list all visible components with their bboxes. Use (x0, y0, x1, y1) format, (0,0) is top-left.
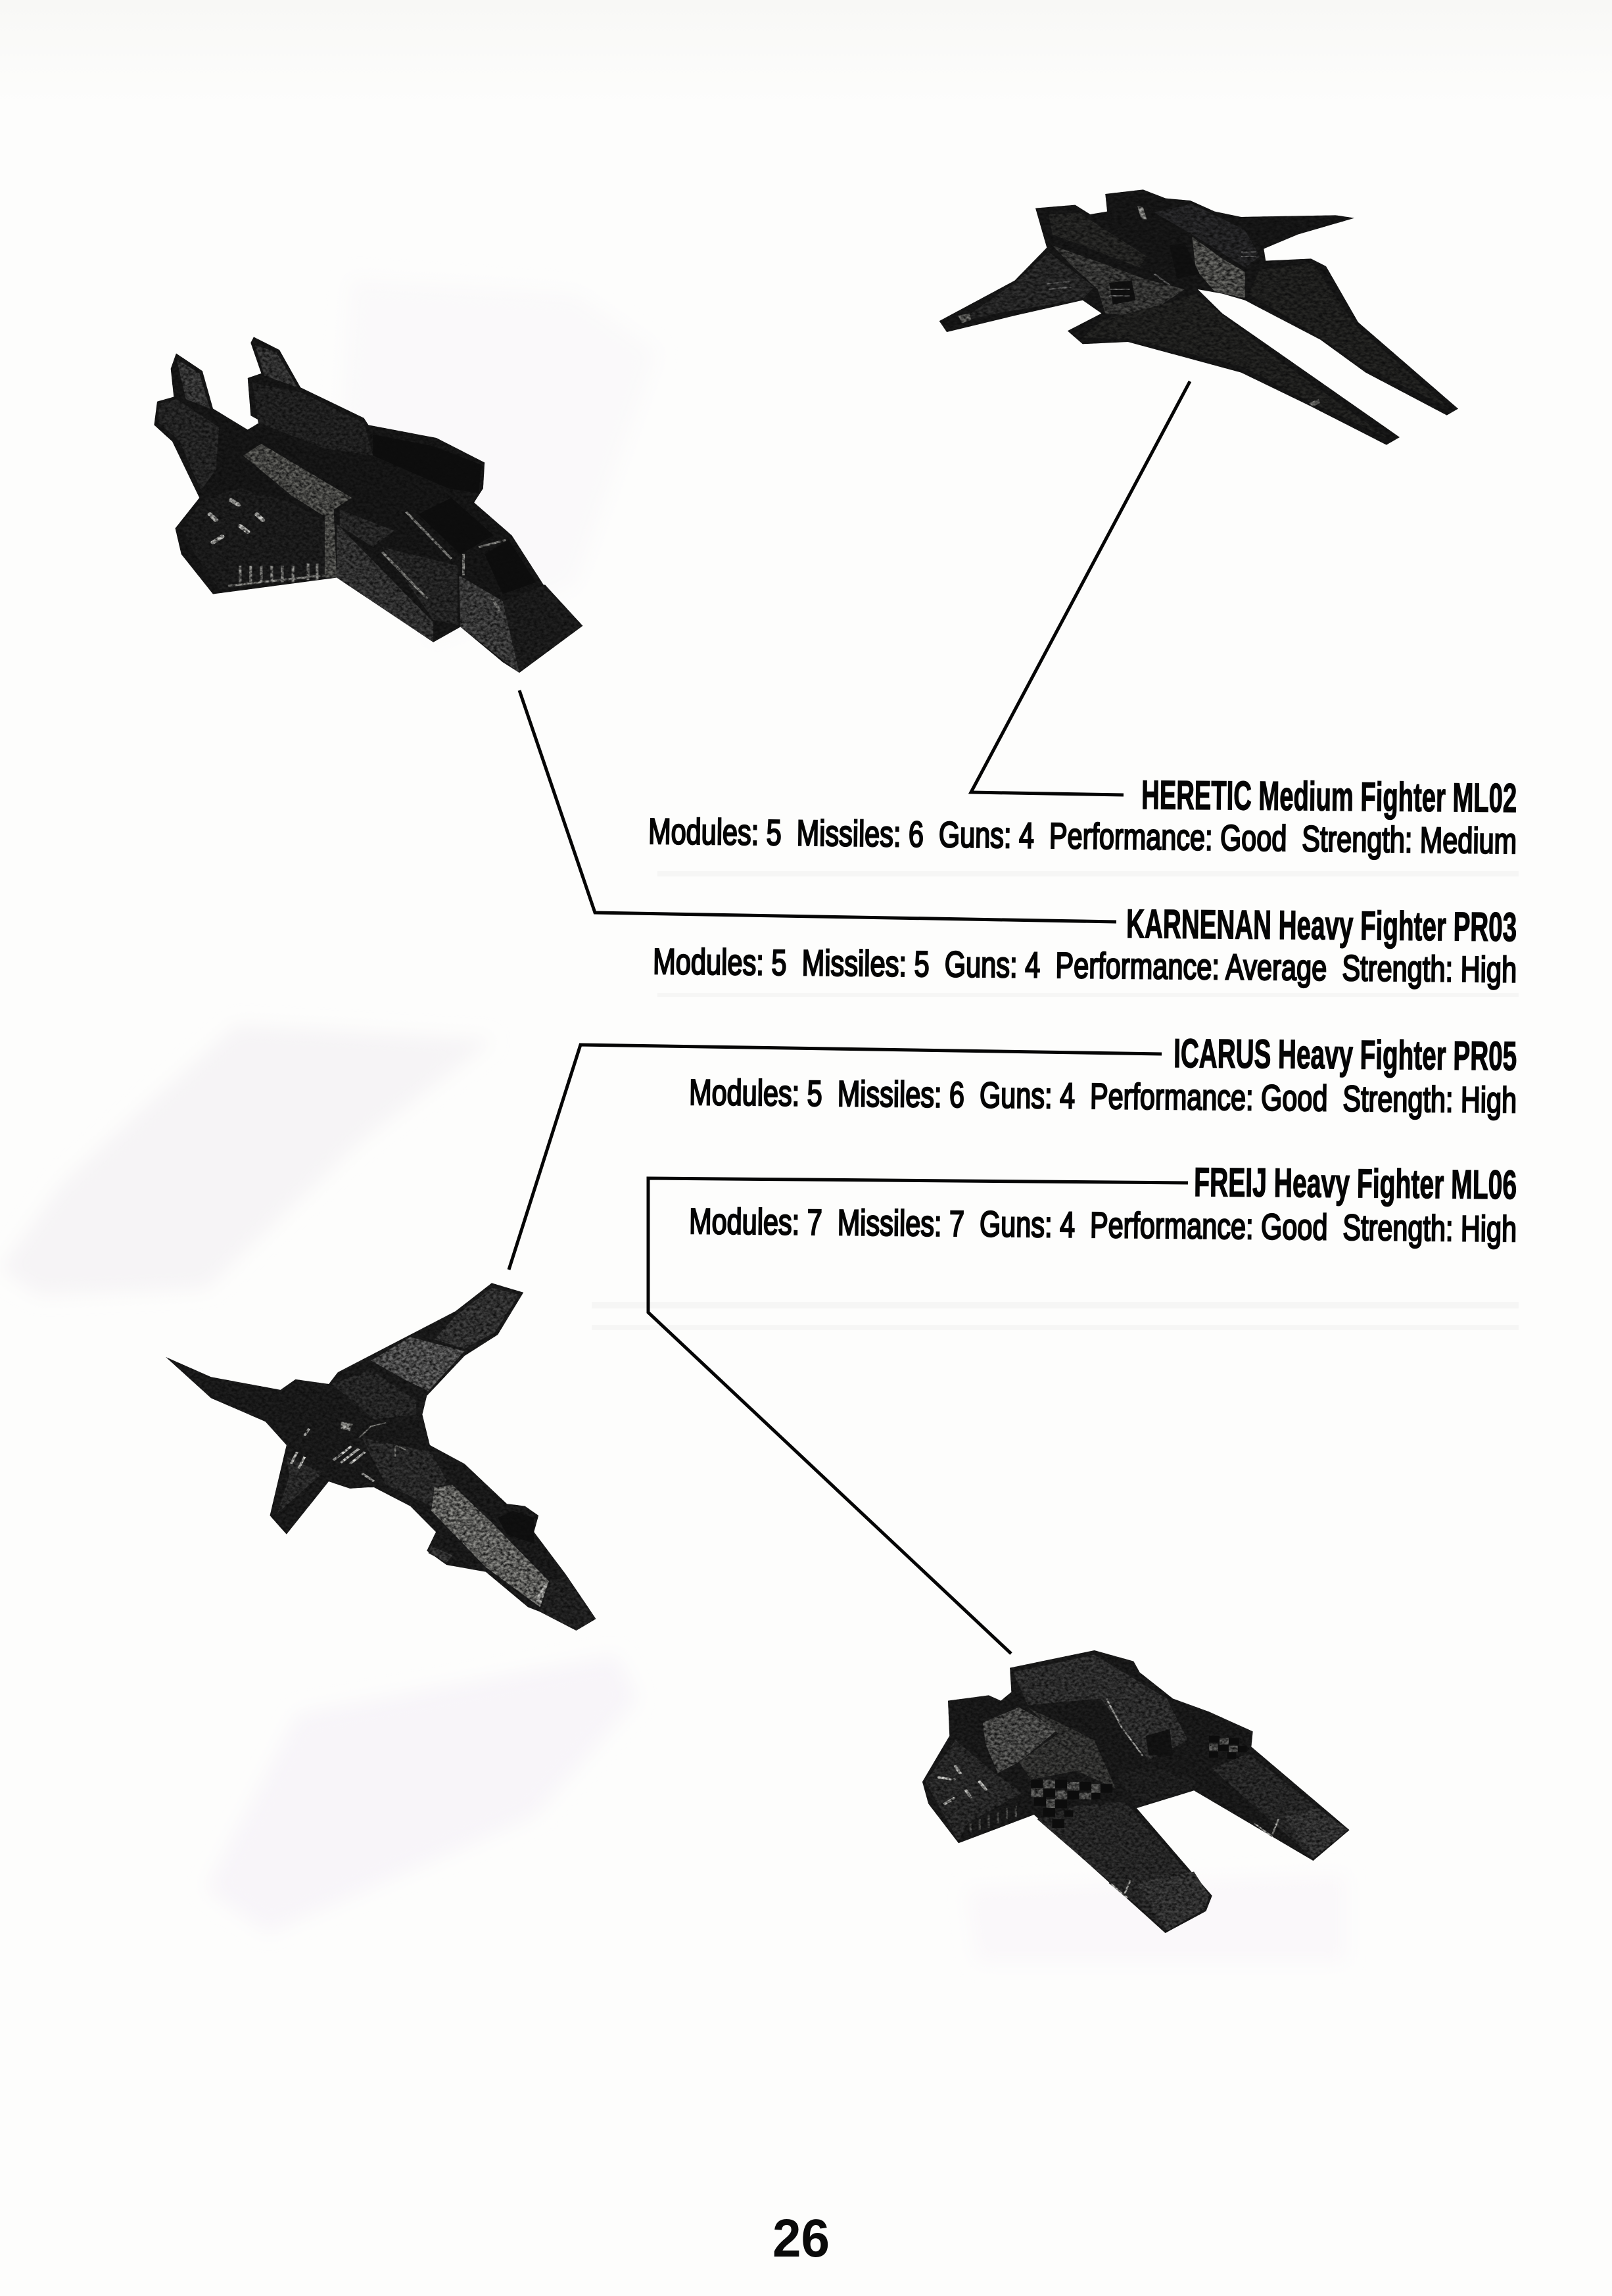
callout: Icarus (689, 1031, 1517, 1120)
callout: Karnenan (653, 901, 1517, 990)
ship: Icarus (166, 1283, 596, 1631)
ship: Karnenan (154, 337, 582, 673)
callout: Heretic (648, 773, 1517, 861)
leader line: Heretic (971, 381, 1190, 795)
leader line: Icarus (509, 1045, 1162, 1270)
ship: Freij (922, 1650, 1350, 1933)
leader line: Freij (648, 1178, 1188, 1654)
callout: Freij (689, 1160, 1517, 1249)
ship: Heretic (939, 189, 1458, 445)
leader line: Karnenan (519, 690, 1116, 922)
page number: 26 (772, 2209, 830, 2268)
